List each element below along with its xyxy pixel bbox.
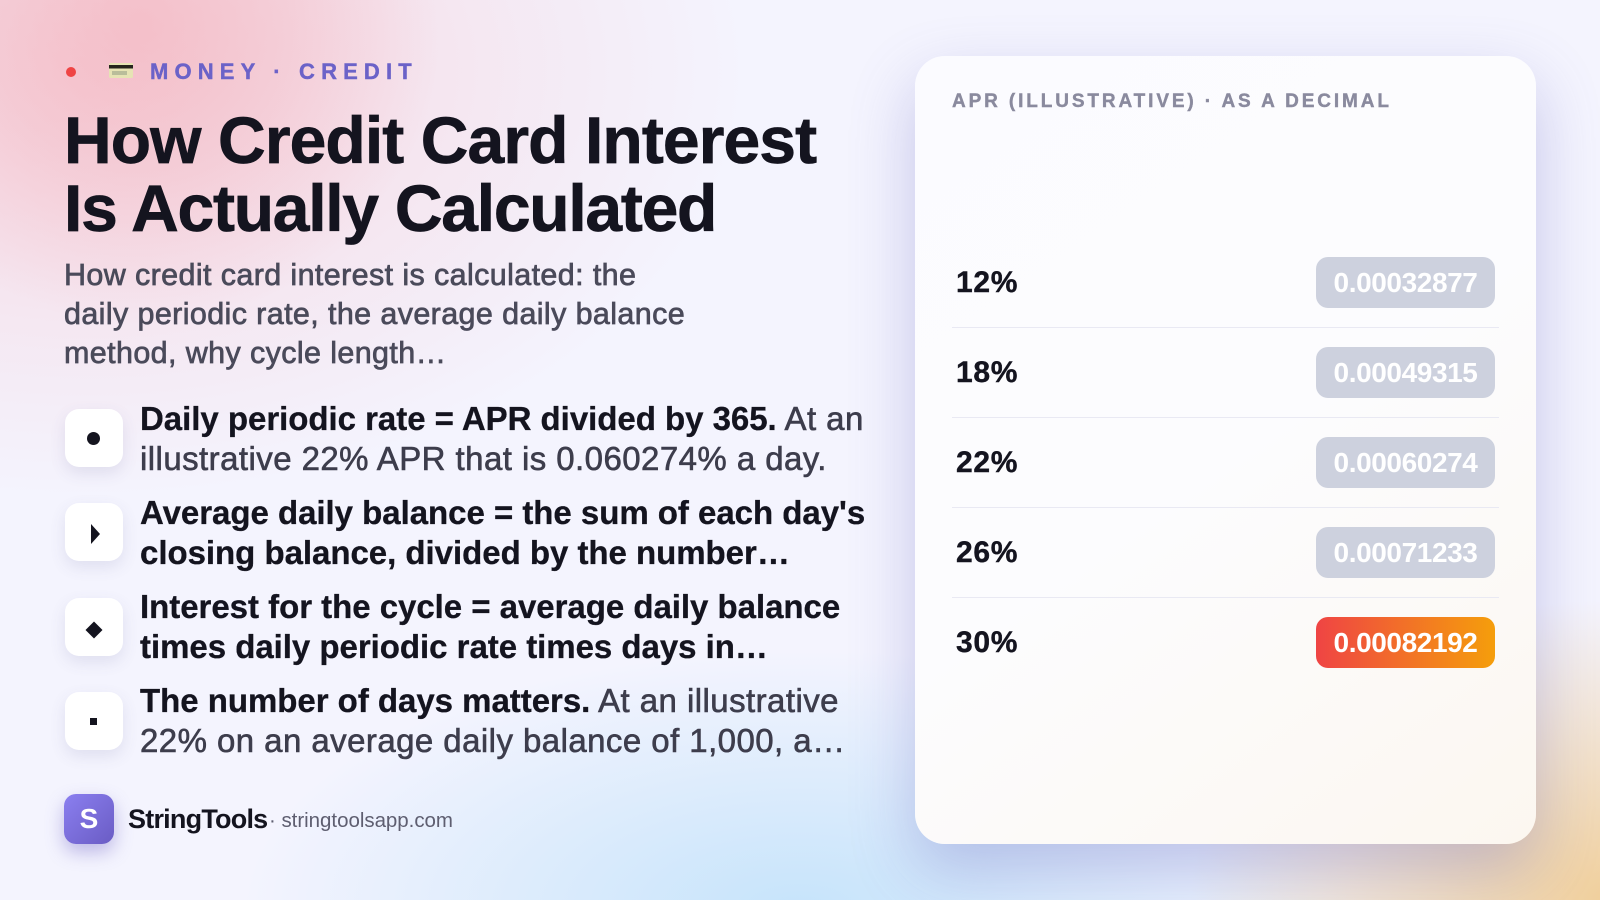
bullet 1 text: [140, 400, 864, 478]
icon: diamond: [65, 598, 123, 656]
bullet 4 text: 22% on an average daily balance of 1,000, a…: [140, 722, 846, 759]
bullet 1 text: Daily periodic rate = APR divided by 365. At an: [140, 400, 864, 437]
row 18%: 0.00049315: [1334, 357, 1477, 388]
subtitle: [64, 258, 685, 370]
red dot: [66, 67, 76, 77]
bullet 2 text: [140, 494, 865, 572]
bullet 4 text: The number of days matters. At an illustrative: [140, 682, 839, 719]
row 30% highlighted: 0.00082192: [1334, 627, 1477, 658]
row 30% highlighted: 30%: [956, 626, 1018, 659]
title: [64, 103, 817, 245]
logo: S: [80, 803, 98, 834]
row 12%: 12%: [956, 266, 1018, 299]
brand name: StringTools: [128, 804, 267, 834]
row 18%: [952, 347, 1499, 418]
bullet 2 text: closing balance, divided by the number…: [140, 534, 790, 571]
bullet 2: [62, 494, 865, 572]
bullet 3 text: [140, 588, 840, 666]
row 12%: 0.00032877: [1334, 267, 1477, 298]
bullet 3 text: times daily periodic rate times days in…: [140, 628, 768, 665]
row 22%: 0.00060274: [1334, 447, 1477, 478]
panel: APR table: [915, 56, 1536, 844]
row 22%: 22%: [956, 446, 1018, 479]
bullet 2 text: Average daily balance = the sum of each day's: [140, 494, 865, 531]
subtitle: daily periodic rate, the average daily balance: [64, 297, 685, 331]
footer brand: [54, 792, 453, 862]
brand url: · stringtoolsapp.com: [269, 809, 453, 832]
bullet 4: [62, 682, 846, 760]
title: How Credit Card Interest: [64, 103, 816, 177]
row 26%: 0.00071233: [1334, 537, 1477, 568]
bullet 3: [62, 588, 840, 666]
icon: credit card: [109, 63, 133, 78]
row 26%: [952, 527, 1499, 598]
bullet 3 text: Interest for the cycle = average daily balance: [140, 588, 840, 625]
row 26%: 26%: [956, 536, 1018, 569]
row 30% highlighted: [956, 617, 1495, 668]
icon: square: [65, 692, 123, 750]
subtitle: How credit card interest is calculated: the: [64, 258, 636, 292]
row 18%: 18%: [956, 356, 1018, 389]
category label: MONEY · CREDIT: [150, 59, 418, 84]
bullet 4 text: [140, 682, 846, 760]
bullet 1 text: illustrative 22% APR that is 0.060274% a day.: [140, 440, 827, 477]
panel heading: APR (ILLUSTRATIVE) · AS A DECIMAL: [952, 91, 1392, 112]
bullet 1: [62, 400, 864, 478]
row 12%: [952, 257, 1499, 328]
logo: [64, 794, 114, 844]
subtitle: method, why cycle length…: [64, 336, 446, 370]
title: Is Actually Calculated: [64, 171, 716, 245]
icon: triangle: [65, 503, 123, 561]
icon: circle: [65, 409, 123, 467]
eyebrow: [66, 59, 418, 84]
row 22%: [952, 437, 1499, 508]
